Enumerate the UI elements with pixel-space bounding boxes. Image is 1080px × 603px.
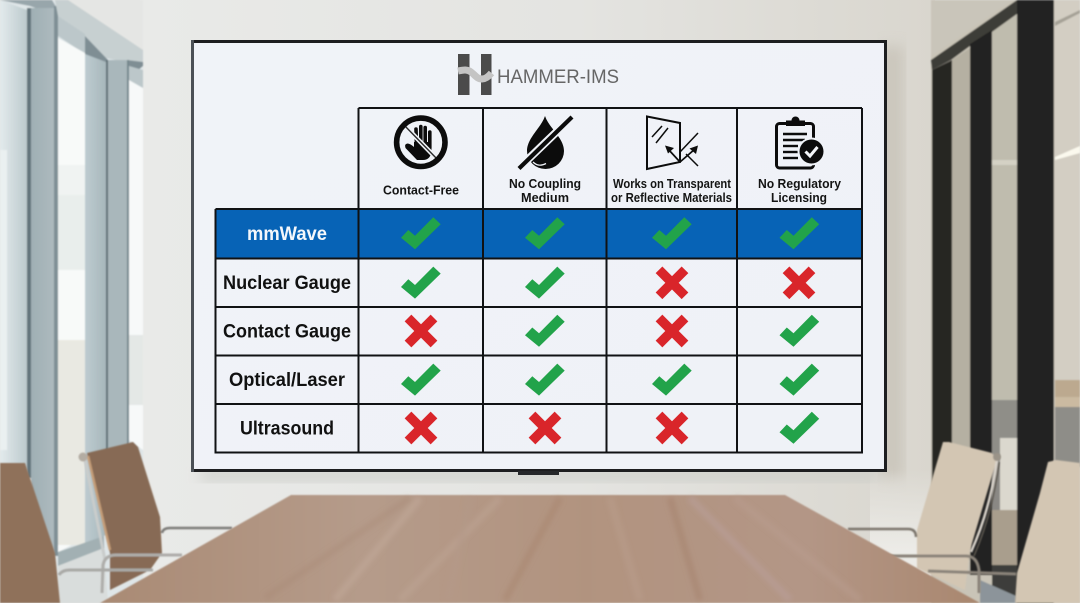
mmWave highlight row: [216, 209, 862, 258]
display screen: [194, 43, 884, 469]
label: No Regulatory Licensing: Licensing: [771, 191, 827, 205]
chairs on the right: [848, 442, 1080, 603]
row: Optical/Laser: Optical/Laser: [229, 370, 346, 391]
comparison table: [214, 108, 863, 452]
label: Contact-Free: Contact-Free: [383, 184, 459, 198]
table grid: [214, 108, 863, 452]
display frame: [191, 40, 887, 472]
icon: crossed out droplet: [518, 116, 573, 169]
row: Contact Gauge: Contact Gauge: [223, 322, 351, 342]
conference table: [100, 495, 980, 603]
logo: Hammer-IMS: HAMMER-IMS: [497, 66, 619, 88]
column: Contact-Free: [383, 118, 459, 198]
label: No Coupling Medium: [509, 177, 581, 205]
label: Works on Transparent or Reflective Materials: or Reflective Materials: [611, 191, 732, 205]
logo: Hammer-IMS: [458, 54, 619, 95]
right glass partition: [931, 0, 1080, 603]
column: No Regulatory Licensing: [758, 116, 841, 205]
left windows: [0, 0, 143, 603]
label: Works on Transparent or Reflective Materials: Works on Transparent: [613, 177, 732, 191]
icon: glass pane with reflected arrows: [647, 116, 698, 169]
column: Works on Transparent or Reflective Materials: [611, 116, 732, 205]
row: mmWave: [247, 217, 819, 249]
icon: no touching hand: [397, 118, 445, 166]
row: Nuclear Gauge: [223, 267, 812, 299]
wall display: [191, 40, 887, 475]
back wall: [140, 0, 935, 603]
label: No Regulatory Licensing: [758, 177, 841, 205]
row: Optical/Laser: [229, 364, 819, 396]
row: Ultrasound: [240, 412, 819, 444]
label: Works on Transparent or Reflective Materials: [611, 177, 732, 205]
icon: clipboard with check badge: [776, 116, 826, 168]
row: Ultrasound: Ultrasound: [240, 418, 334, 440]
wood grain: [265, 498, 860, 600]
chairs on the left: [0, 442, 232, 603]
row: Nuclear Gauge: Nuclear Gauge: [223, 273, 351, 294]
label: No Regulatory Licensing: No Regulatory: [758, 177, 841, 191]
row: Contact Gauge: [223, 315, 819, 347]
column: No Coupling Medium: [509, 116, 581, 205]
display camera bar: [518, 471, 559, 475]
row: mmWave: mmWave: [247, 224, 327, 245]
label: No Coupling Medium: Medium: [521, 191, 569, 205]
label: No Coupling Medium: No Coupling: [509, 177, 581, 191]
